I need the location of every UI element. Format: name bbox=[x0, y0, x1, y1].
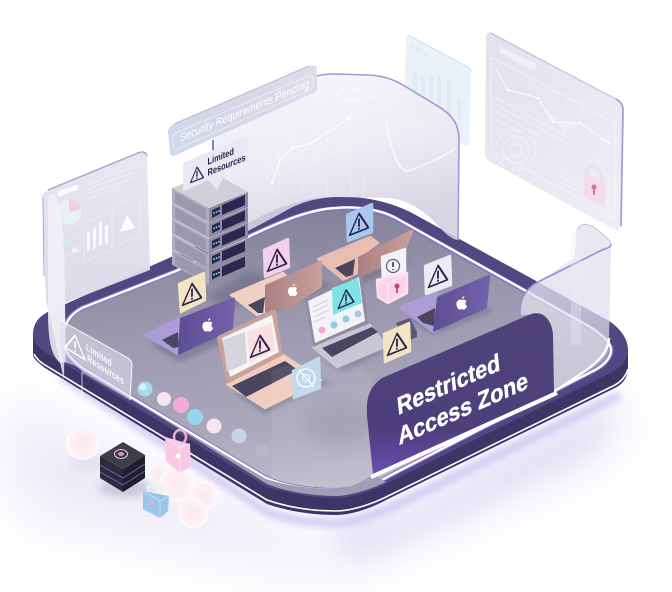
panel: left glass strip bbox=[48, 194, 66, 363]
laptop: purple right bbox=[400, 275, 495, 335]
callout: limited resources above server: Limited bbox=[208, 146, 234, 167]
callout: limited resources glass sign bbox=[60, 320, 132, 425]
icon: warning tile blue bbox=[347, 204, 372, 241]
sign: restricted access zone: Restricted bbox=[396, 349, 501, 421]
icon: padlock bbox=[584, 166, 605, 205]
icon: dark device stack bbox=[99, 442, 151, 497]
floor bbox=[65, 210, 609, 488]
icon: warning tile cream bbox=[179, 273, 205, 312]
panel: back glass wall bbox=[213, 74, 459, 247]
spheres row bbox=[138, 382, 269, 458]
laptop: rose back centre bbox=[231, 261, 335, 316]
callout: limited resources glass sign: Resources bbox=[87, 351, 124, 387]
purple inner rim bbox=[65, 210, 609, 488]
callout: security requirements pending: Security Requirements Pending bbox=[180, 78, 309, 145]
base side bbox=[33, 197, 628, 515]
callout stem bbox=[212, 140, 214, 153]
laptop: silver with teal screen bbox=[305, 273, 395, 372]
sign: restricted access zone: Access Zone bbox=[397, 368, 529, 451]
icon: bug tile bbox=[293, 358, 320, 398]
icon: blue padlock bbox=[143, 484, 169, 518]
callout: security requirements pending bbox=[168, 65, 317, 156]
sign: restricted access zone bbox=[367, 313, 557, 477]
neon right wall foot bbox=[553, 338, 609, 392]
icon: warning tile cream right bbox=[384, 323, 410, 362]
laptop: rose back right bbox=[318, 230, 413, 285]
small device bbox=[396, 318, 417, 342]
icon: warning tile white bbox=[425, 256, 451, 294]
panel: right curved glass bbox=[520, 224, 611, 392]
panel: server stack bbox=[172, 172, 290, 310]
spheres large pink bbox=[66, 426, 218, 528]
icon: pink padlock bbox=[165, 430, 191, 473]
callout: limited resources glass sign: Limited bbox=[86, 340, 112, 369]
icon: padlock with alert bbox=[377, 249, 407, 303]
floor glass band bbox=[133, 400, 386, 496]
laptop: rose front bbox=[217, 310, 332, 414]
platform shadow bbox=[0, 400, 650, 575]
floor shade smudge bbox=[305, 403, 375, 447]
callout: limited resources above server bbox=[183, 137, 249, 191]
base top bbox=[33, 197, 628, 498]
panel: right floating dashboard bbox=[485, 32, 623, 230]
panel: small blue dashboard bbox=[404, 35, 471, 146]
callout: limited resources above server: Resources bbox=[208, 152, 246, 178]
front glass bbox=[272, 363, 371, 486]
icon: warning tile pink bbox=[264, 239, 289, 277]
neon floor edge bbox=[63, 207, 611, 490]
panel: left glass dashboard bbox=[42, 152, 150, 380]
neon line on base side bbox=[34, 354, 628, 511]
laptop: purple left bbox=[145, 298, 240, 362]
